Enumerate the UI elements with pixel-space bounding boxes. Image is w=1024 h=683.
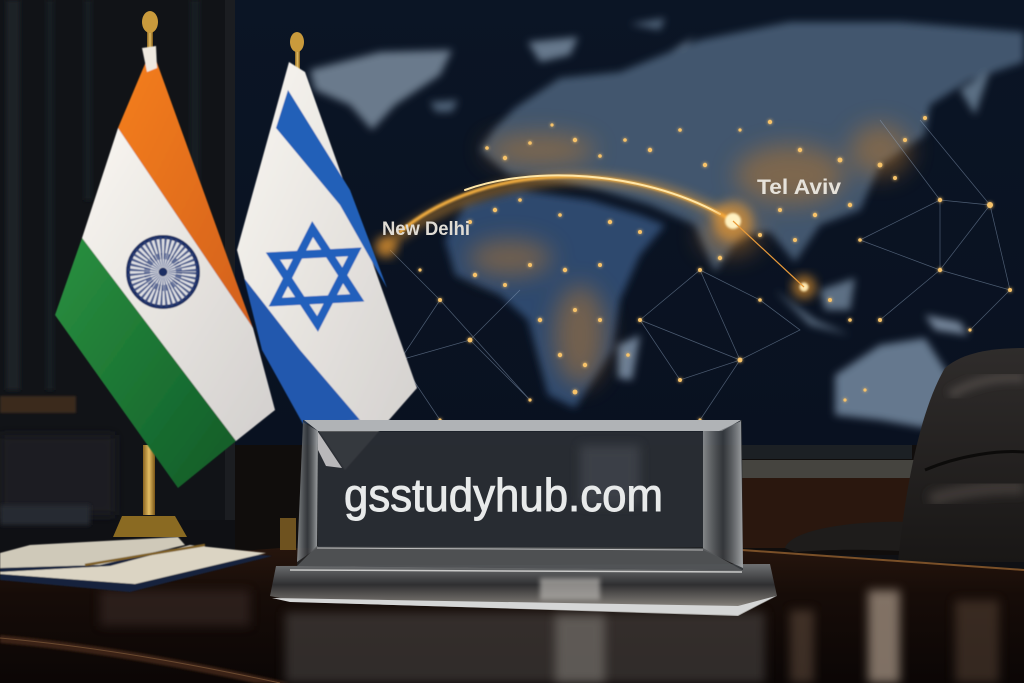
label: New Delhi: New Delhi (382, 219, 470, 240)
continents (310, 18, 1024, 428)
plate base (270, 564, 777, 616)
flag stand: India (113, 11, 187, 537)
notebook and pen (0, 537, 272, 592)
desk (0, 548, 1024, 683)
route end points (375, 201, 816, 299)
icon: star of David (272, 227, 359, 326)
flag: Israel (237, 62, 417, 470)
label: Tel Aviv: Tel Aviv (757, 176, 841, 199)
plate body (297, 420, 743, 570)
plate text: gsstudyhub.com (344, 469, 663, 521)
network lines (390, 120, 1010, 420)
world map screen (235, 0, 1024, 445)
flag stand: Israel (280, 32, 304, 550)
glowing route arc (385, 175, 733, 247)
warm city glow (468, 124, 910, 385)
shelf under map (235, 445, 1024, 555)
flag: India (55, 46, 275, 488)
icon: Ashoka chakra (128, 237, 198, 307)
city dots (398, 116, 1012, 422)
acrylic nameplate (270, 420, 777, 616)
office chair (785, 348, 1024, 562)
